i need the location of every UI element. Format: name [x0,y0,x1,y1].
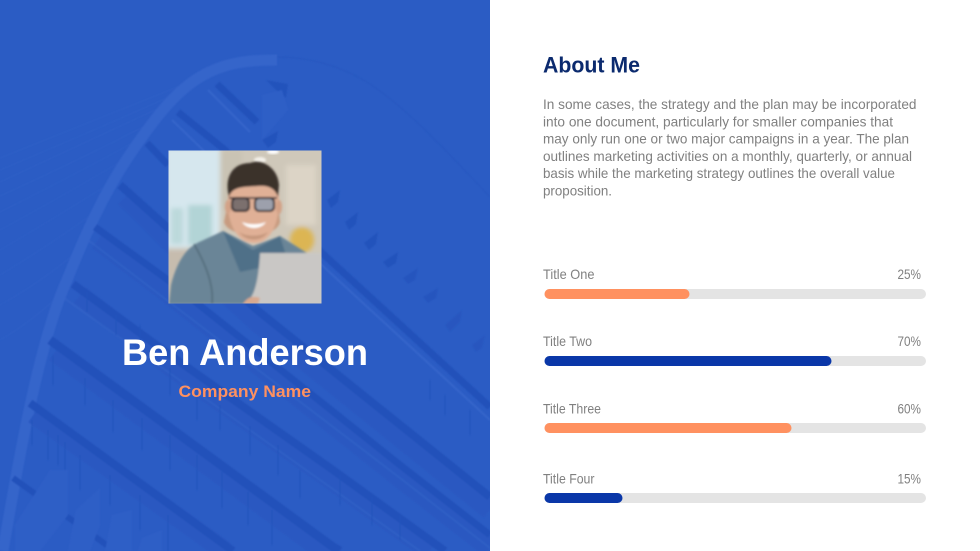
body paragraph: may only run one or two major campaigns in a year. The plan [543,132,909,147]
progress: Title One: Title One [543,267,594,282]
progress: Title Three: Title Three [543,402,601,416]
progress: Title Two: 70% [898,334,921,349]
panel: about me [543,52,916,198]
progress: Title Two [543,334,926,366]
progress: Title Four: 15% [898,472,921,486]
progress: Title Three [543,402,926,433]
body paragraph: into one document, particularly for smaller companies that [543,114,893,129]
body paragraph: outlines marketing activities on a monthly, quarterly, or annual [543,149,912,164]
body paragraph: proposition. [543,184,612,198]
progress: Title Three: 60% [898,402,921,416]
progress: Title One [543,267,926,299]
heading: About Me: About Me [543,52,640,78]
body paragraph: basis while the marketing strategy outlines the overall value [543,166,895,181]
body paragraph: In some cases, the strategy and the plan may be incorporated [543,97,916,112]
progress: Title One: 25% [898,267,921,282]
progress: Title Four: Title Four [543,472,595,486]
body paragraph [543,97,916,198]
photo: smiling man with glasses at laptop [166,148,322,305]
progress: Title Four [543,472,926,503]
progress: Title Two: Title Two [543,334,592,349]
company name: Company Name [178,382,311,401]
panel: blue profile background [0,0,490,551]
name heading: Ben Anderson [122,332,368,373]
background building image [0,57,490,551]
